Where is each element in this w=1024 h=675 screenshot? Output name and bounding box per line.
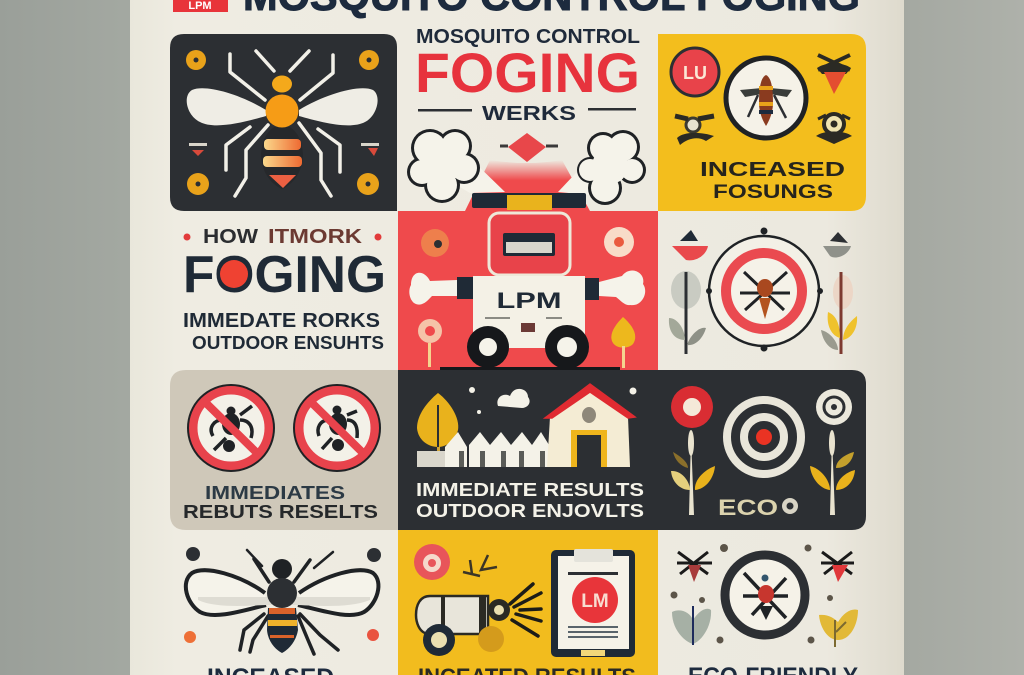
heading: how it works: HOW bbox=[203, 226, 258, 248]
text: immediates results: IMMEDIATES bbox=[205, 483, 345, 503]
icon: red badge bbox=[671, 386, 713, 428]
icon: clipboard bbox=[551, 549, 635, 657]
icon: side insects bbox=[675, 55, 852, 145]
poster sheet bbox=[130, 0, 904, 675]
panel: eco friendly bbox=[670, 544, 858, 675]
title badge: LPM bbox=[188, 0, 212, 12]
text: immediates results: REBUTS RESELTS bbox=[183, 502, 378, 522]
icon: mosquito target bbox=[726, 58, 806, 138]
icon: right nozzle and smoke bbox=[585, 271, 645, 305]
heading: fogging: FOGING bbox=[183, 246, 386, 304]
panel: mosquito on dark bbox=[170, 34, 397, 211]
heading line: MOSQUITO CONTROL bbox=[416, 26, 640, 48]
icon: tree bbox=[417, 393, 458, 467]
icon: small dots bbox=[184, 547, 381, 643]
icon: tank bbox=[489, 213, 570, 275]
icon: left sprout bbox=[671, 430, 715, 515]
icon: top bar bbox=[472, 193, 586, 210]
icon: left insect bbox=[677, 552, 712, 582]
panel: fogging machine red bbox=[398, 129, 658, 370]
title badge bbox=[173, 0, 228, 12]
icon: scattered dots bbox=[670, 544, 833, 644]
text: increased focusings: INCEASED bbox=[700, 159, 845, 181]
icon: house bbox=[545, 384, 635, 467]
icon: diamond cap bbox=[500, 133, 558, 162]
panel: target mosquito with plants bbox=[669, 228, 857, 354]
icon: eco target bbox=[727, 400, 801, 474]
icon: crossed mosquito bbox=[740, 272, 790, 319]
icon: spray lines bbox=[510, 584, 541, 636]
icon: red badge bbox=[671, 48, 719, 96]
heading: how it works bbox=[184, 226, 382, 248]
icon: red panel flowers bbox=[418, 227, 635, 368]
heading fogging: FOGING bbox=[415, 41, 640, 104]
icon: left plant bbox=[669, 271, 706, 354]
icon: mosquito bbox=[187, 51, 378, 196]
icon: machine body: LPM bbox=[496, 288, 562, 313]
icon: clipboard: LM bbox=[581, 591, 609, 612]
text: immediate results outdoor: IMMEDIATE RESULTS bbox=[416, 480, 644, 500]
icon: fogger bbox=[416, 596, 510, 656]
text: increased focusings bbox=[700, 159, 845, 203]
icon: left cloud bbox=[407, 129, 505, 203]
icon: right plant bbox=[821, 272, 857, 354]
icon: small insects bbox=[189, 143, 379, 156]
icon: right cloud bbox=[558, 130, 646, 205]
text: benefits: OUTDOOR ENSUHTS bbox=[192, 333, 384, 353]
title bbox=[173, 0, 860, 19]
icon: target dot bbox=[414, 544, 450, 580]
icon: picket fence bbox=[417, 432, 549, 467]
icon: right leaf bbox=[819, 610, 858, 647]
icon: left nozzle and smoke bbox=[409, 273, 473, 305]
icon: left leaf bbox=[672, 606, 711, 645]
icon: no mosquito left bbox=[188, 385, 274, 471]
text: benefits: IMMEDATE RORKS bbox=[183, 310, 380, 332]
icon: crossed mosquito circle bbox=[725, 555, 805, 635]
icon: cloud and stars bbox=[469, 387, 636, 414]
heading works: WERKS bbox=[482, 103, 576, 125]
icon: machine body bbox=[473, 276, 585, 348]
panel: no mosquito signs bbox=[170, 370, 398, 530]
icon: target ring bbox=[706, 228, 823, 352]
icon: no mosquito right bbox=[294, 385, 380, 471]
icon: right sprout bbox=[810, 430, 855, 515]
panel: outdoor house dark bbox=[398, 370, 866, 530]
text: eco bbox=[718, 495, 798, 520]
text: immediate results outdoor: OUTDOOR ENJOVLTS bbox=[416, 501, 644, 521]
panel: how it works fogging bbox=[183, 226, 386, 353]
heading: how it works: ITMORK bbox=[268, 226, 363, 248]
text: eco: ECO bbox=[718, 495, 778, 520]
icon: small target bbox=[816, 389, 852, 425]
icon: top insects bbox=[672, 230, 851, 260]
icon: red haze above machine bbox=[465, 160, 590, 211]
heading: mosquito control fogging works bbox=[415, 26, 640, 125]
icon: red badge: LU bbox=[683, 63, 707, 83]
icon: right insect bbox=[821, 552, 854, 582]
icon: mosquito bbox=[186, 550, 378, 654]
icon: corner dots bbox=[186, 50, 379, 195]
panel: mosquito outline bbox=[184, 547, 381, 675]
icon: scatter bbox=[463, 555, 497, 576]
panel: fogger and clipboard yellow bbox=[398, 530, 658, 675]
text: immediates results bbox=[183, 483, 378, 522]
text: increased focusings: FOSUNGS bbox=[713, 182, 833, 203]
icon: wheels bbox=[440, 325, 620, 370]
text: benefits bbox=[183, 310, 384, 353]
panel: increased focus yellow bbox=[658, 34, 866, 211]
text: immediate results outdoor bbox=[416, 480, 644, 521]
